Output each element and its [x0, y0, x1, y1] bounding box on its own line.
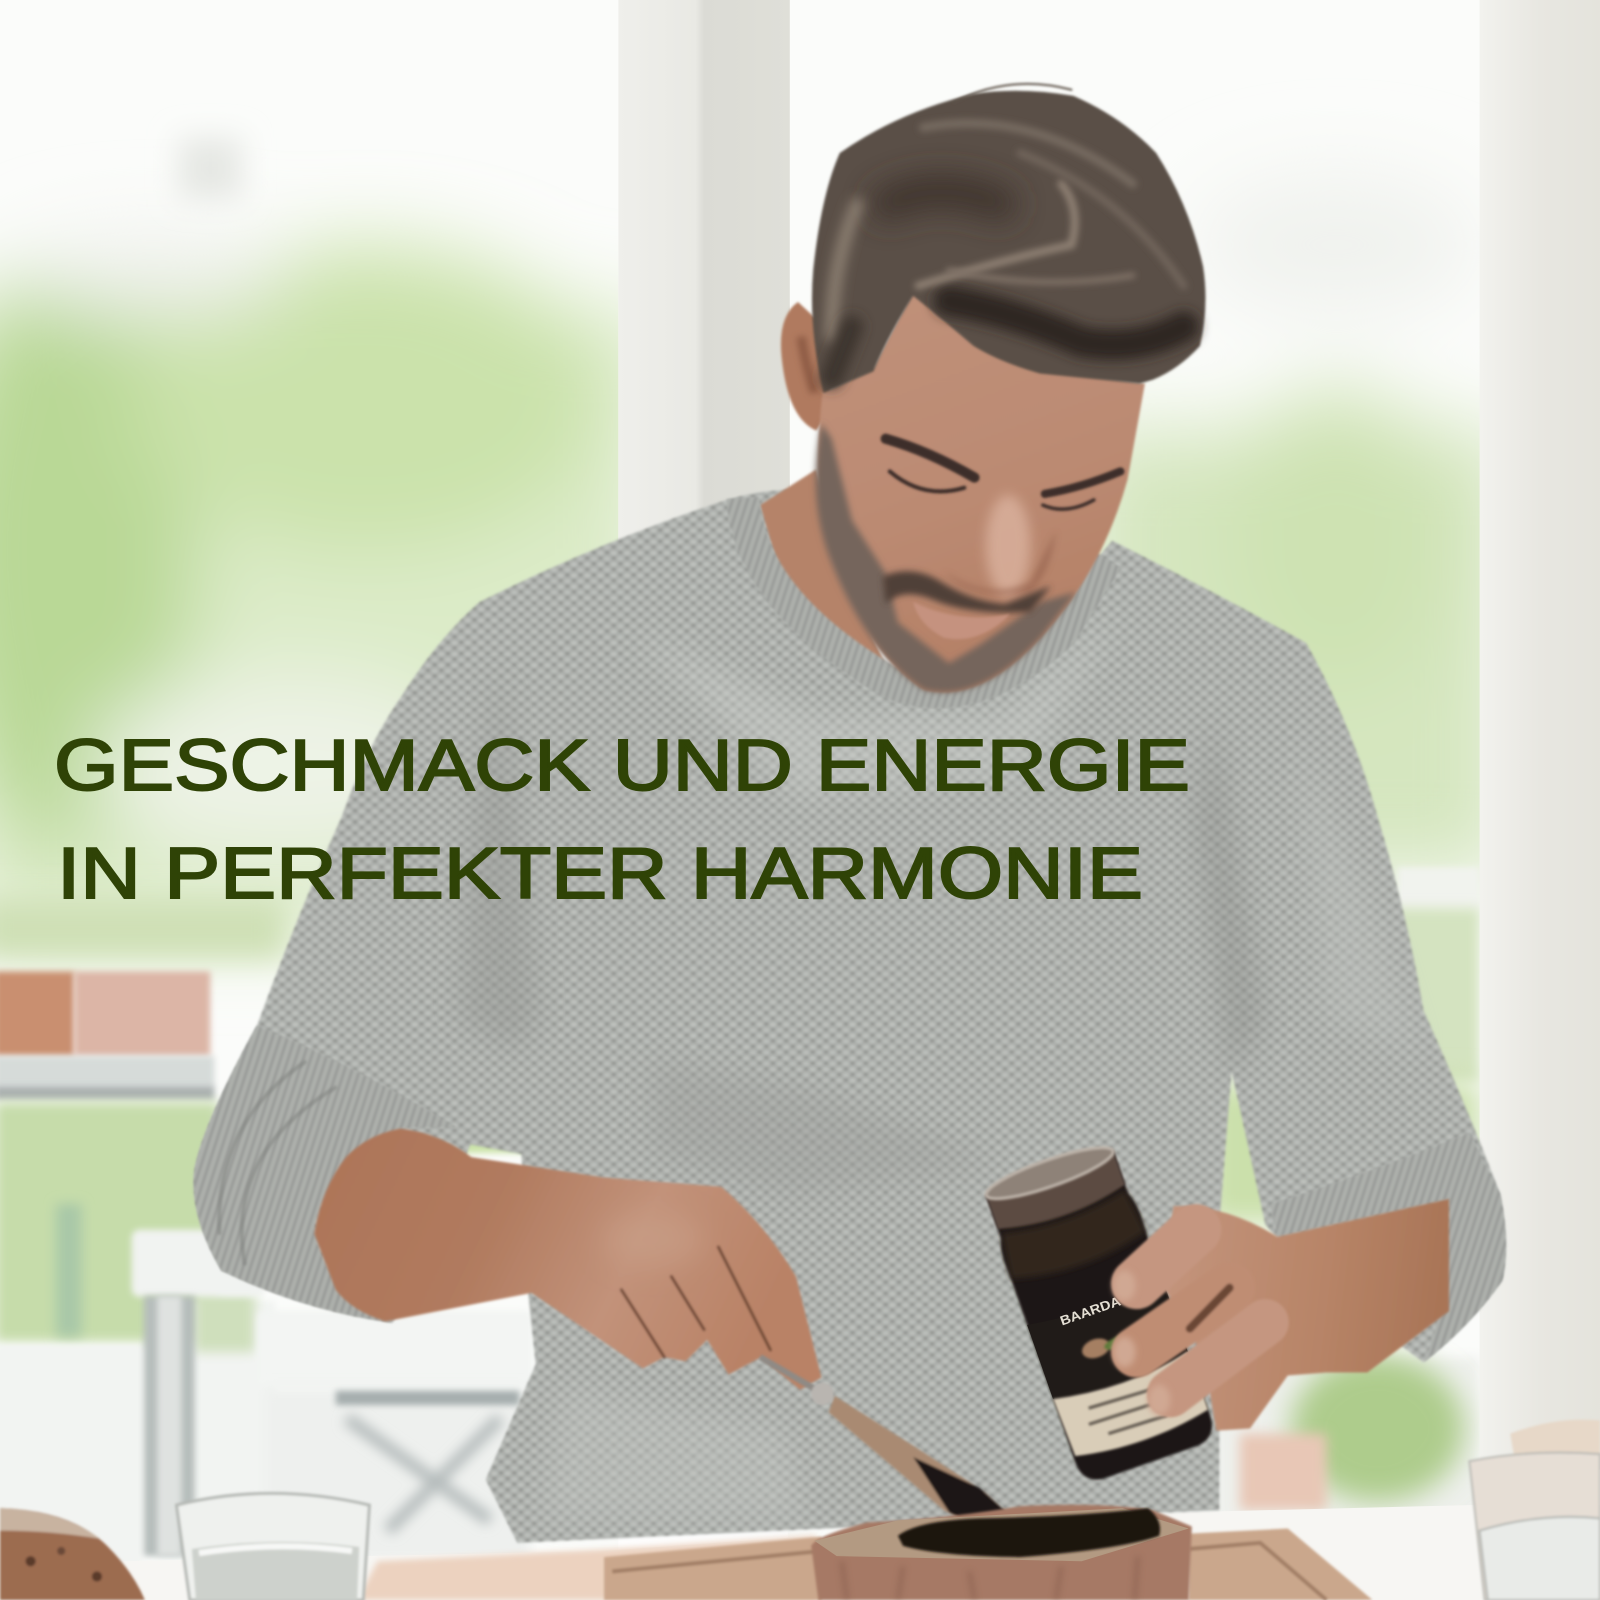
- jar label text lines: [1084, 1385, 1167, 1441]
- eyebrows and eyelids: [886, 439, 1120, 509]
- neck: [760, 469, 890, 673]
- nose highlight: [986, 495, 1031, 597]
- background: left window with blurred garden: [0, 123, 618, 1562]
- jar: [977, 1137, 1219, 1486]
- jar cream label: [1053, 1352, 1211, 1464]
- sweater left cuff folds: [219, 1061, 337, 1265]
- ear: [781, 302, 832, 431]
- glasses and cup at right: [1469, 1420, 1600, 1600]
- headline: [54, 726, 1190, 914]
- beard: [816, 423, 1077, 692]
- knuckle highlights: [602, 1213, 704, 1266]
- jar body: [982, 1149, 1219, 1486]
- moustache: [883, 571, 1051, 613]
- jar brand text: BAARDA: [1058, 1293, 1123, 1328]
- drinking glass: [177, 1493, 369, 1600]
- bread slice with spread: [811, 1505, 1192, 1600]
- table: [122, 1505, 1600, 1600]
- jar shoulder contents: [996, 1188, 1149, 1288]
- jar neck glass: [986, 1151, 1128, 1238]
- face: [818, 291, 1145, 692]
- fingers: [1137, 1230, 1265, 1394]
- hair shading and streaks: [832, 84, 1184, 378]
- bread loaf: [0, 1508, 145, 1600]
- dark spread: [898, 1508, 1160, 1557]
- cutting board: [604, 1529, 1372, 1600]
- ear inner shadow: [801, 337, 814, 393]
- headline line 1: GESCHMACK UND ENERGIE: [54, 726, 1190, 806]
- back of hand and forearm: [1163, 1199, 1449, 1431]
- knife: [760, 1357, 1015, 1543]
- finger gaps: [621, 1247, 770, 1357]
- window frame: right post: [1480, 0, 1600, 1469]
- headline line 2: IN PERFEKTER HARMONIE: [57, 834, 1143, 914]
- right forearm and hand: [1113, 1199, 1449, 1431]
- window frame: centre mullion: [618, 0, 790, 571]
- lips: [913, 602, 1010, 639]
- sweater collar: [743, 498, 1107, 692]
- fingernails: [1113, 1270, 1170, 1415]
- jar rim: [982, 1138, 1118, 1208]
- hair: [812, 91, 1206, 393]
- sweater shading: [459, 612, 1418, 1520]
- background: right window with blurred garden: [1098, 152, 1480, 1512]
- sweater left cuff: [194, 1026, 457, 1322]
- jar label dark part: [1027, 1278, 1190, 1405]
- left forearm and hand: [314, 1129, 821, 1390]
- nose and cheek shadow: [944, 531, 1056, 594]
- jar herb icon: [1079, 1325, 1141, 1362]
- head: [781, 84, 1206, 692]
- sweater right cuff: [1270, 1133, 1506, 1362]
- sweater: [194, 490, 1506, 1543]
